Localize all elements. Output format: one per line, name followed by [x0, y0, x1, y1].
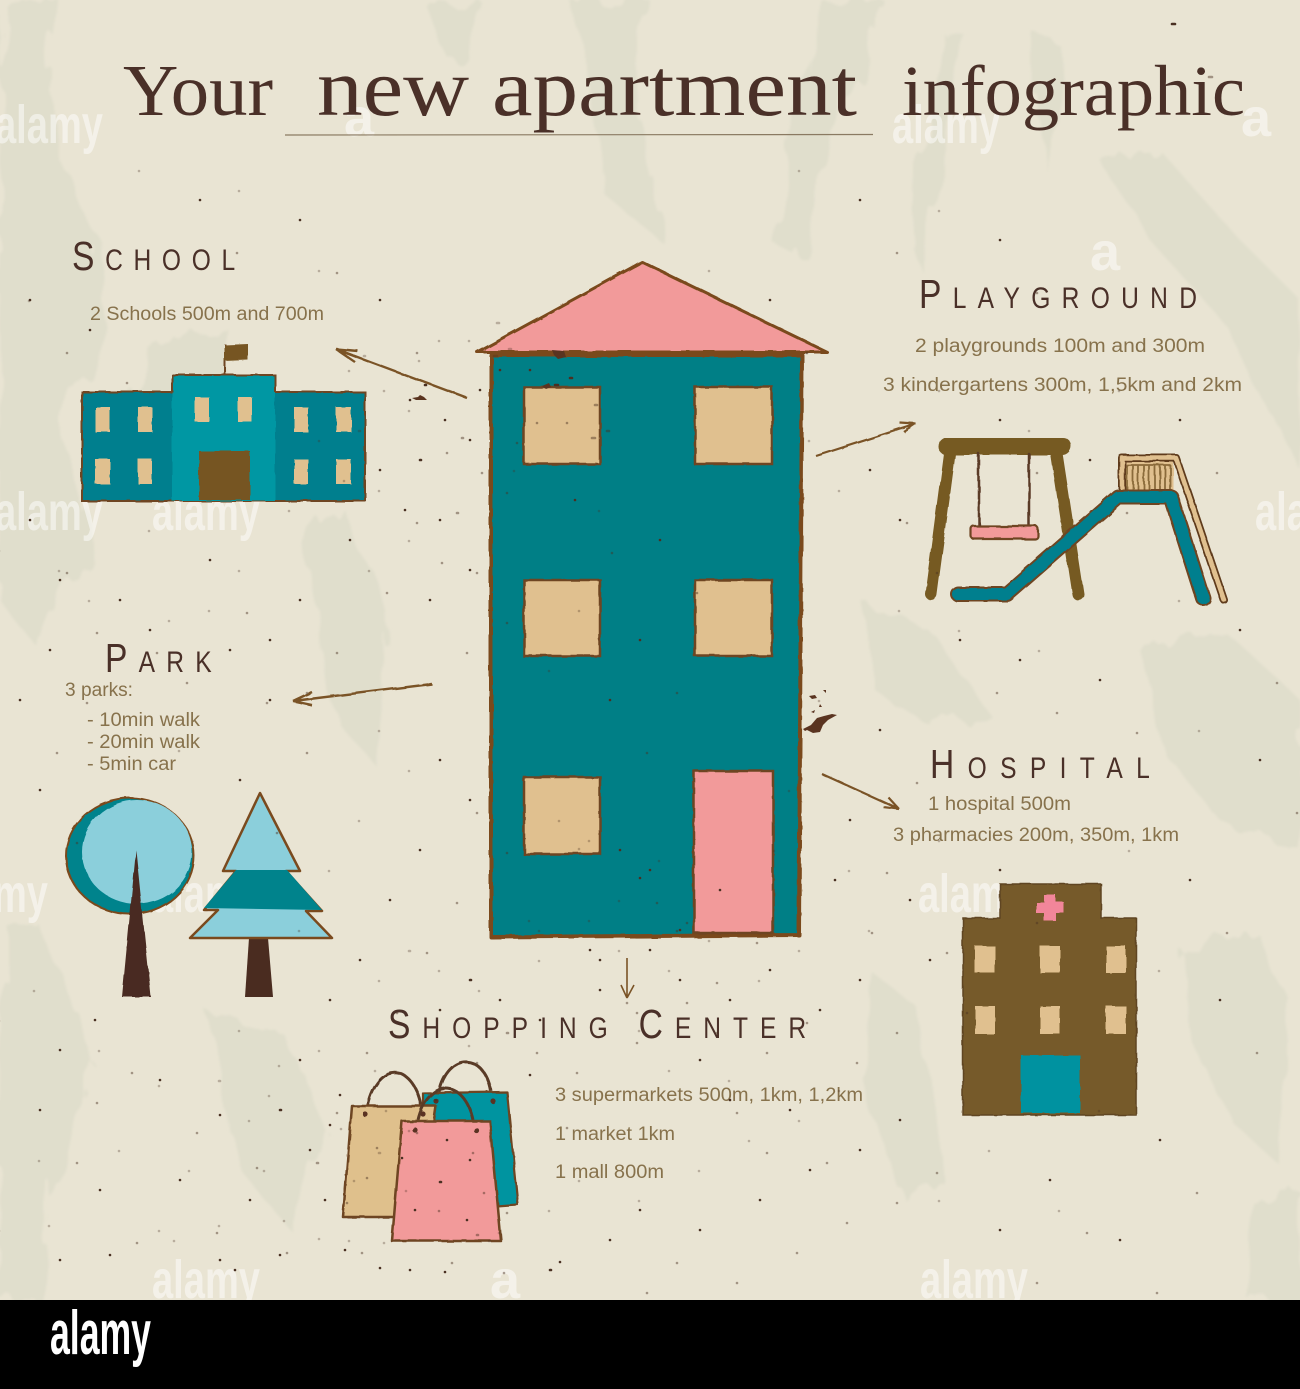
watermark: alamy: alamy — [920, 1250, 1028, 1310]
text: shopping distances: 1 mall 800m — [555, 1162, 664, 1183]
icon: hospital — [963, 884, 1136, 1115]
text: shopping distances: 3 supermarkets 500m, 1km, 1,2km — [555, 1085, 863, 1106]
watermark: alamy: a — [1241, 88, 1272, 148]
watermark: alamy: a — [1090, 222, 1121, 282]
watermark: alamy: alamy — [152, 482, 260, 542]
watermark: alamy: a — [490, 1250, 521, 1310]
arrow: to playground — [816, 423, 916, 456]
door — [694, 771, 773, 933]
icon: shopping bags — [343, 1062, 518, 1241]
title — [123, 42, 1245, 133]
text: school distances: 2 Schools 500m and 700m — [90, 304, 324, 325]
slide — [958, 497, 1203, 598]
title: infographic — [902, 51, 1245, 131]
heading: shopping center: S HOPPING C ENTER — [388, 1001, 806, 1047]
swing frame — [931, 450, 1078, 594]
icon: round tree — [66, 798, 194, 997]
watermark: alamy: alamy — [892, 95, 1000, 155]
watermark: alamy: alamy — [152, 864, 260, 924]
text: park distances: - 20min walk — [87, 732, 201, 753]
watermark: alamy: alamy — [597, 614, 705, 674]
building body — [491, 355, 802, 937]
text: playground distances — [883, 336, 1242, 396]
main apartment building — [477, 262, 827, 937]
text: park distances: 3 parks: — [65, 680, 133, 701]
watermark: alamy: alamy — [152, 1250, 260, 1310]
ladder — [1121, 458, 1173, 492]
text: park distances: - 10min walk — [87, 710, 201, 731]
text: playground distances: 2 playgrounds 100m and 300m — [915, 336, 1205, 357]
text: hospital distances — [893, 794, 1179, 846]
heading: school: S CHOOL — [72, 233, 235, 279]
heading: playground: P LAYGROUND — [919, 271, 1197, 317]
text: shopping distances: 1 market 1km — [555, 1124, 675, 1145]
arrow: to school — [336, 349, 467, 398]
footer bar — [0, 1300, 1300, 1389]
text: hospital distances: 1 hospital 500m — [928, 794, 1071, 815]
text: shopping distances — [555, 1085, 863, 1183]
arrow: to shopping center — [621, 958, 634, 998]
title: new apartment — [317, 42, 857, 133]
watermark: alamy: alamy — [918, 864, 1026, 924]
heading: hospital: H OSPITAL — [930, 741, 1150, 787]
text: park distances — [65, 680, 201, 775]
arrow: to park — [293, 684, 432, 705]
footer logo: alamy: alamy — [50, 1299, 151, 1368]
watermark: alamy: a — [344, 88, 375, 148]
title: Your — [123, 50, 273, 131]
windows — [524, 387, 772, 854]
arrow: to hospital — [822, 774, 899, 809]
icon: playground — [931, 446, 1224, 600]
text: park distances: - 5min car — [87, 754, 177, 775]
text: hospital distances: 3 pharmacies 200m, 350m, 1km — [893, 825, 1179, 846]
text: playground distances: 3 kindergartens 300m, 1,5km and 2km — [883, 375, 1242, 396]
roof — [477, 262, 827, 352]
icon: school — [82, 344, 365, 501]
icon: pine tree — [190, 793, 332, 997]
heading: park: P ARK — [105, 635, 212, 681]
